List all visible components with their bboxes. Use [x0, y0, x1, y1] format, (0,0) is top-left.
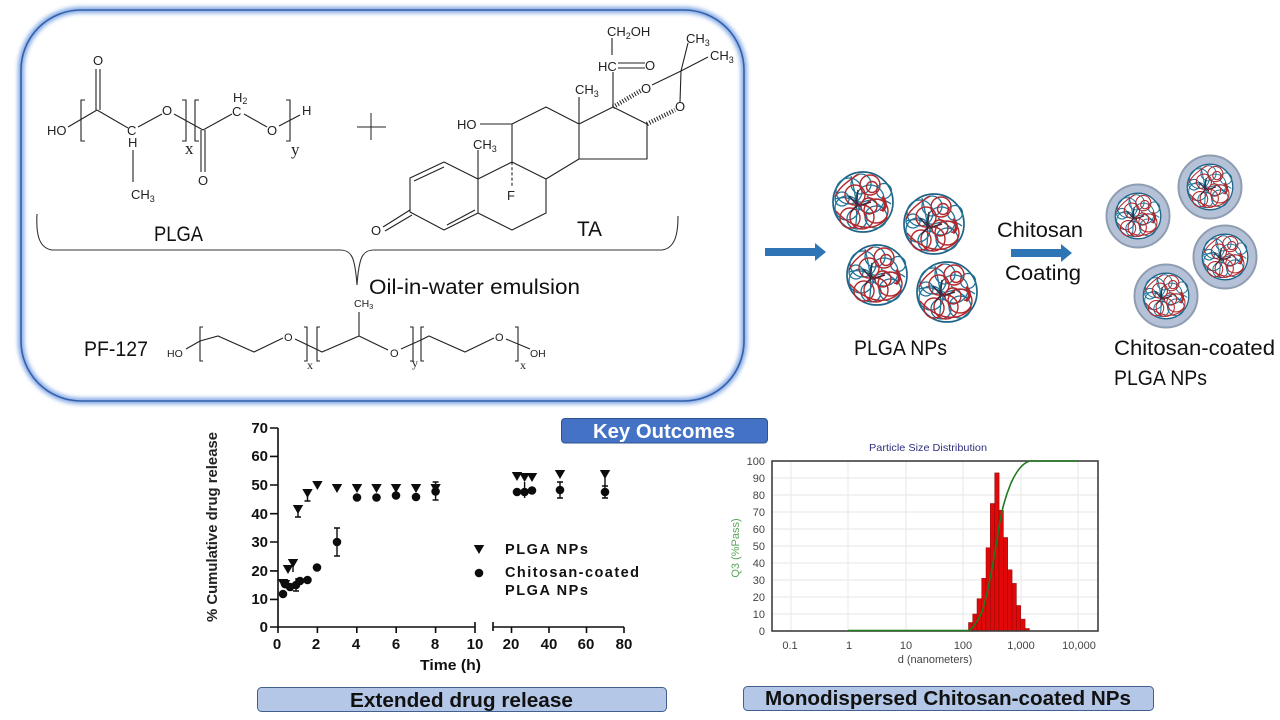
- molecule: triamcinolone acetonide (TA) structure: HC: [598, 59, 617, 74]
- molecule: triamcinolone acetonide (TA) structure: O: [645, 58, 655, 73]
- chart: particle size distribution: [730, 442, 1098, 666]
- molecule: triamcinolone acetonide (TA) structure: 3: [594, 89, 599, 99]
- y axis title: % Cumulative drug release: [204, 432, 221, 622]
- molecule: PF-127 structure: OH: [530, 348, 546, 360]
- y axis with ticks: 70: [251, 420, 268, 437]
- y axis labels: [747, 456, 765, 638]
- molecule: PLGA structure: H: [128, 135, 137, 150]
- molecule: PLGA structure: O: [267, 123, 277, 138]
- heading: key outcomes: Key Outcomes: [593, 421, 735, 443]
- molecule: PLGA structure: H: [302, 103, 311, 118]
- x axis with ticks: 40: [541, 636, 557, 653]
- chart title: Particle Size Distribution: [869, 442, 987, 454]
- label: chitosan-coated PLGA NPs: [1114, 337, 1275, 390]
- x axis title: d (nanometers): [898, 654, 972, 666]
- y axis with ticks: 10: [251, 591, 268, 608]
- molecule: triamcinolone acetonide (TA) structure: [371, 24, 734, 238]
- molecule: PF-127 structure: x: [307, 358, 313, 372]
- molecule: PF-127 structure: y: [412, 356, 418, 370]
- molecule: triamcinolone acetonide (TA) structure: CH: [686, 31, 705, 46]
- molecule: triamcinolone acetonide (TA) structure: 3: [492, 144, 497, 154]
- x axis with ticks: 10: [467, 636, 483, 653]
- y axis with ticks: 20: [251, 563, 268, 580]
- molecule: PF-127 structure: 3: [369, 302, 373, 311]
- legend: Chitosan-coated: [505, 565, 639, 581]
- y axis labels: 10: [753, 609, 765, 621]
- molecule: PF-127 structure: O: [284, 332, 293, 344]
- molecule: PLGA structure: O: [162, 103, 172, 118]
- y axis with ticks: 60: [251, 448, 268, 465]
- molecule: triamcinolone acetonide (TA) structure: O: [641, 81, 651, 96]
- icon: plus sign: [357, 113, 386, 140]
- grid: [772, 461, 1098, 631]
- x axis with ticks: 0: [273, 636, 281, 653]
- molecule: PLGA structure: C: [232, 104, 241, 119]
- caption: monodispersed chitosan-coated NPs: Monodispersed Chitosan-coated NPs: [765, 688, 1131, 710]
- histogram bars: [968, 473, 1029, 631]
- y axis labels: 30: [753, 575, 765, 587]
- series: chitosan-coated PLGA NPs: [279, 486, 609, 598]
- molecule: PLGA structure: H: [233, 90, 242, 105]
- x axis labels: 10: [900, 640, 912, 652]
- label: TA: TA: [577, 218, 602, 241]
- y axis labels: 70: [753, 507, 765, 519]
- cumulative curve: [848, 461, 1078, 630]
- label: chitosan coating step: Coating: [1005, 262, 1081, 285]
- molecule: PF-127 structure: HO: [167, 348, 183, 360]
- arrow: PLGA NPs to chitosan-coated NPs: [1011, 244, 1072, 262]
- legend: [474, 542, 639, 599]
- caption: extended drug release: [258, 688, 666, 712]
- label: PF-127: PF-127: [84, 338, 148, 361]
- legend: PLGA NPs: [505, 583, 588, 599]
- arrow: emulsion to PLGA NPs: [765, 243, 826, 261]
- molecule: PLGA structure: [47, 53, 311, 204]
- legend: PLGA NPs: [505, 542, 588, 558]
- x axis with ticks: 80: [616, 636, 632, 653]
- molecule: triamcinolone acetonide (TA) structure: O: [371, 223, 381, 238]
- molecule: PLGA structure: CH: [131, 187, 150, 202]
- molecule: PF-127 structure: x: [520, 358, 526, 372]
- y axis labels: 80: [753, 490, 765, 502]
- x axis with ticks: 8: [431, 636, 439, 653]
- molecule: PF-127 structure: O: [390, 348, 399, 360]
- molecule: triamcinolone acetonide (TA) structure: CH: [607, 24, 626, 39]
- x axis with ticks: 60: [578, 636, 594, 653]
- x axis labels: 100: [954, 640, 972, 652]
- molecule: triamcinolone acetonide (TA) structure: HO: [457, 117, 476, 132]
- molecule: triamcinolone acetonide (TA) structure: CH: [710, 48, 729, 63]
- molecule: PF-127 structure: CH: [354, 298, 369, 310]
- x axis title: Time (h): [420, 658, 481, 674]
- molecule: PLGA structure: O: [198, 173, 208, 188]
- y axis title: Q3 (%Pass): [730, 518, 742, 578]
- molecule: PF-127 structure: [167, 298, 546, 372]
- y axis with ticks: 50: [251, 477, 268, 494]
- chart: cumulative drug release over time: [204, 420, 639, 674]
- molecule: triamcinolone acetonide (TA) structure: 2: [626, 31, 631, 41]
- y axis labels: 60: [753, 524, 765, 536]
- x axis with ticks: [273, 622, 632, 653]
- x axis labels: 0.1: [782, 640, 798, 652]
- y axis with ticks: [251, 420, 278, 636]
- label: PLGA: PLGA: [154, 223, 203, 246]
- molecule: triamcinolone acetonide (TA) structure: O: [675, 99, 685, 114]
- plot frame: [772, 461, 1098, 631]
- caption: extended drug release: Extended drug release: [350, 690, 573, 712]
- error bars: [292, 470, 608, 591]
- x axis with ticks: 6: [392, 636, 400, 653]
- y axis labels: 90: [753, 473, 765, 485]
- molecule: PLGA structure: HO: [47, 123, 66, 138]
- label: chitosan-coated PLGA NPs: PLGA NPs: [1114, 367, 1207, 390]
- label: PLGA NPs: PLGA NPs: [854, 337, 947, 360]
- group: PLGA nanoparticles: [833, 172, 977, 322]
- label: oil-in-water emulsion: Oil-in-water emulsion: [369, 276, 580, 299]
- x axis labels: [782, 640, 1096, 652]
- panel: synthesis of the oil-in-water emulsion: [21, 10, 744, 401]
- x axis with ticks: 20: [503, 636, 519, 653]
- label: chitosan-coated PLGA NPs: Chitosan-coated: [1114, 337, 1275, 360]
- y axis labels: 20: [753, 592, 765, 604]
- molecule: triamcinolone acetonide (TA) structure: CH: [575, 82, 594, 97]
- y axis with ticks: 40: [251, 506, 268, 523]
- brace joining PLGA and TA: [37, 214, 678, 285]
- molecule: triamcinolone acetonide (TA) structure: 3: [705, 38, 710, 48]
- molecule: PLGA structure: 2: [242, 96, 247, 106]
- x axis labels: 10,000: [1062, 640, 1096, 652]
- molecule: triamcinolone acetonide (TA) structure: CH: [473, 137, 492, 152]
- y axis with ticks: 30: [251, 534, 268, 551]
- y axis labels: 100: [747, 456, 765, 468]
- label: chitosan coating step: [997, 219, 1083, 285]
- molecule: PLGA structure: y: [291, 140, 300, 159]
- label: chitosan coating step: Chitosan: [997, 219, 1083, 242]
- x axis with ticks: 2: [312, 636, 320, 653]
- y axis labels: 0: [759, 626, 765, 638]
- group: chitosan-coated nanoparticles: [1106, 156, 1256, 328]
- molecule: PLGA structure: O: [93, 53, 103, 68]
- x axis with ticks: 4: [352, 636, 361, 653]
- molecule: PF-127 structure: O: [495, 332, 504, 344]
- series: PLGA NPs: [278, 470, 610, 589]
- heading: key outcomes: [562, 418, 768, 443]
- molecule: PLGA structure: C: [127, 123, 136, 138]
- molecule: triamcinolone acetonide (TA) structure: 3: [729, 55, 734, 65]
- y axis labels: 40: [753, 558, 765, 570]
- molecule: triamcinolone acetonide (TA) structure: OH: [631, 24, 650, 39]
- molecule: triamcinolone acetonide (TA) structure: F: [507, 188, 515, 203]
- x axis labels: 1,000: [1007, 640, 1035, 652]
- y axis with ticks: 0: [260, 619, 268, 636]
- y axis labels: 50: [753, 541, 765, 553]
- x axis labels: 1: [846, 640, 852, 652]
- molecule: PLGA structure: 3: [150, 194, 155, 204]
- molecule: PLGA structure: x: [185, 139, 194, 158]
